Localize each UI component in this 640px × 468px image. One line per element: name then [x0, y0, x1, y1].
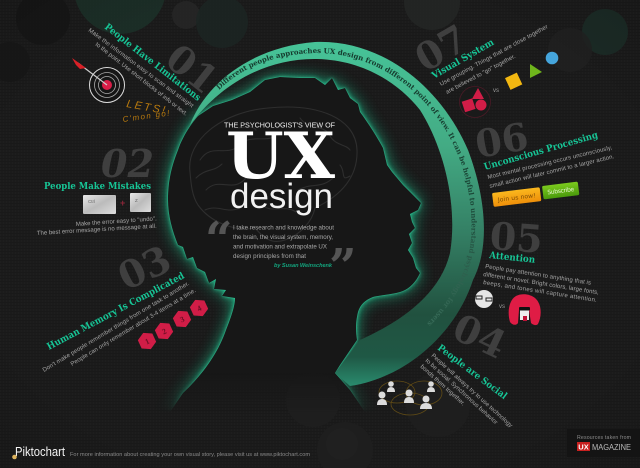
- section 03: human memory is complicated: [42, 236, 210, 374]
- section 04: people are social: [377, 304, 513, 429]
- section 01: people have limitations: Make the information easy to scan and straight: [87, 28, 194, 110]
- quote block: the brain, the visual system, memory,: [233, 234, 333, 241]
- section 06: unconscious processing: Most mental processing occurs unconsciously,: [487, 145, 613, 181]
- quote block: and motivation and extrapolate UX: [233, 244, 327, 250]
- credit box: ux magazine: Resources taken from: [577, 435, 631, 441]
- ribbon with curved text: Different people approaches UX design from different point of view. It can be helpful to understand psychology for users: [216, 48, 477, 326]
- icon: numbered hexagons: 4: [195, 304, 203, 313]
- handwritten note: C'mon go!: [122, 108, 171, 124]
- icon: numbered hexagons: [136, 296, 210, 353]
- icon: subscribe button: [542, 182, 579, 199]
- handwritten note: LETS!: [125, 98, 166, 117]
- section 02: people make mistakes: [37, 141, 157, 237]
- icon: numbered hexagons: 3: [178, 315, 186, 324]
- icon: numbered hexagons: 2: [160, 327, 168, 336]
- section 05: attention: People pay attention to anything that is: [485, 264, 591, 287]
- section 03: human memory is complicated: Don't make people remember things from one task to another.: [42, 281, 191, 374]
- section 03: human memory is complicated: 03: [111, 236, 178, 299]
- section 04: people are social: 04: [446, 304, 513, 368]
- quote block: I take research and knowledge about: [233, 224, 334, 232]
- footer: piktochart logo: Piktochart: [15, 444, 65, 459]
- section 07: visual system: Visual System: [429, 37, 496, 82]
- quote block: design principles from that: [233, 253, 306, 260]
- quote block: by Susan Weinschenk: [274, 263, 333, 269]
- icon: join us now button: [492, 187, 541, 207]
- credit box: ux magazine: [567, 429, 640, 457]
- icon: ctrl plus z keys: +: [120, 198, 125, 208]
- section 07: visual system: 07: [407, 15, 475, 81]
- section 02: people make mistakes: 02: [101, 141, 154, 186]
- section 05: attention: Attention: [488, 250, 536, 266]
- icon: ctrl plus z keys: Ctrl: [88, 199, 95, 204]
- section 06: unconscious processing: Unconscious Processing: [483, 130, 600, 173]
- section 04: people are social: to be social. Synchronous behavior: [424, 358, 498, 426]
- icon: social network of people: [377, 381, 442, 415]
- section 07: visual system: [407, 15, 558, 117]
- handwritten note: [122, 98, 171, 124]
- section 01: people have limitations: to the point. Use short blocks of info or text.: [94, 42, 188, 118]
- section 05: attention: beeps, and tones will capture attention.: [483, 280, 598, 304]
- section 01: people have limitations: People Have Limitations: [102, 22, 203, 104]
- brain outline: [190, 107, 357, 241]
- section 06: unconscious processing: small action will later commit to a larger action.: [489, 154, 615, 190]
- section 07: visual system: are believed to "go" together.: [445, 54, 517, 96]
- section 03: human memory is complicated: Human Memory Is Complicated: [45, 270, 187, 353]
- icon: grouped shapes vs separated shapes: vs: [493, 88, 499, 94]
- title: THE PSYCHOLOGIST'S VIEW OF: [224, 120, 335, 130]
- head silhouette with teal glow: [156, 66, 429, 409]
- icon: target and arrow: [72, 58, 124, 102]
- icon: grouped shapes vs separated shapes: [460, 52, 558, 118]
- title: design: [230, 177, 333, 216]
- section 05: attention: [475, 213, 600, 325]
- credit box: ux magazine: UX: [578, 442, 589, 452]
- section 04: people are social: People are Social: [435, 343, 509, 402]
- icon: join us now button: Join us now!: [497, 192, 536, 204]
- title: UX: [226, 119, 335, 194]
- icon: ctrl plus z keys: [83, 193, 151, 214]
- section 06: unconscious processing: [472, 113, 615, 207]
- section 04: people are social: People will always try to use technology: [430, 353, 513, 429]
- section 04: people are social: bonds them together.: [419, 364, 466, 408]
- footer note: For more information about creating your own visual story, please visit us at www.piktochart.com: [70, 452, 310, 458]
- icon: plain face vs red-haired face: vs: [499, 304, 505, 310]
- section 02: people make mistakes: Make the error easy to "undo".: [76, 216, 157, 228]
- section 07: visual system: Use grouping. Things that are close together: [439, 24, 549, 88]
- quote block: [205, 212, 357, 295]
- section 02: people make mistakes: The best error message is no message at all.: [37, 224, 157, 237]
- quote block: “: [205, 212, 233, 268]
- section 01: people have limitations: [72, 22, 227, 124]
- section 05: attention: different or novel. Bright colors, large fonts,: [483, 272, 600, 296]
- section 06: unconscious processing: 06: [472, 113, 532, 167]
- credit box: ux magazine: MAGAZINE: [592, 443, 631, 452]
- icon: numbered hexagons: 1: [143, 337, 151, 346]
- section 02: people make mistakes: People Make Mistakes: [44, 181, 151, 192]
- section 03: human memory is complicated: People can only remember about 3-4 items at a time.: [70, 288, 198, 368]
- icon: ctrl plus z keys: Z: [135, 198, 138, 203]
- section 01: people have limitations: 01: [157, 35, 227, 103]
- quote block: ”: [329, 239, 357, 295]
- icon: subscribe button: Subscribe: [547, 186, 575, 196]
- section 05: attention: 05: [488, 213, 544, 262]
